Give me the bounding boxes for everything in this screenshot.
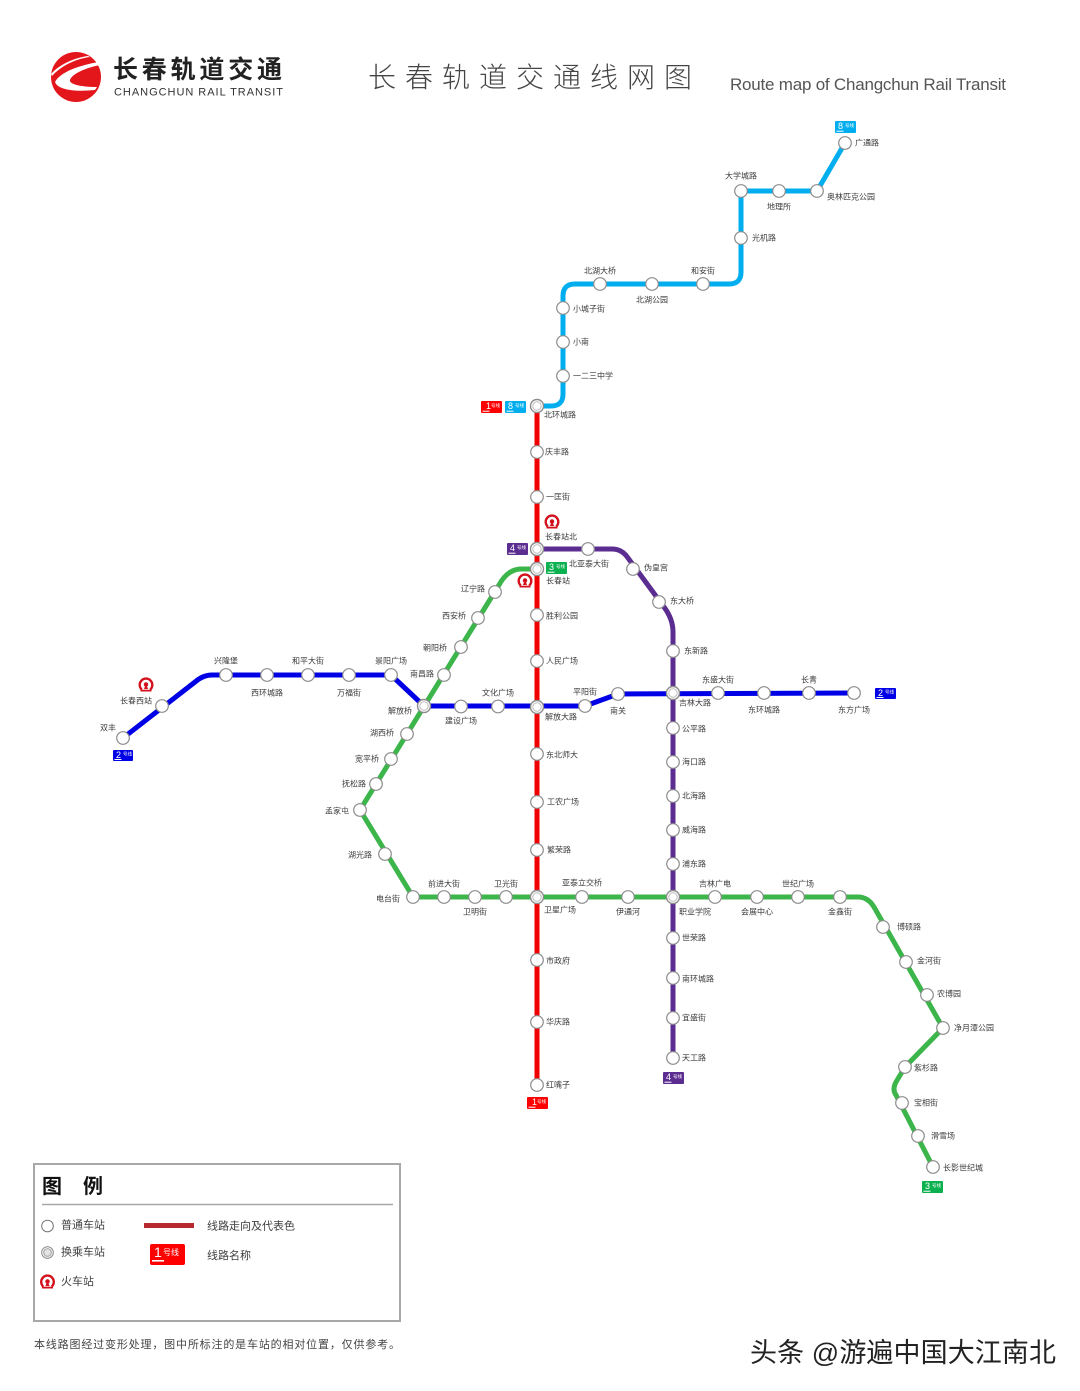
line 3 green: 长影世纪城 xyxy=(943,1162,983,1172)
line 3 green: 朝阳桥 xyxy=(423,642,447,652)
line 3 green: 净月潭公园 xyxy=(954,1022,994,1032)
line 4 purple: 浦东路 xyxy=(682,858,706,868)
line 3 green: 农博园 xyxy=(937,988,961,998)
line 8 cyan xyxy=(537,137,879,406)
line badges: 号线 xyxy=(517,544,526,551)
line 1 red: 卫星广场 xyxy=(544,904,576,914)
line 4 purple: 伪皇宫 xyxy=(644,562,668,572)
line 8 cyan: 一二三中学 xyxy=(573,370,613,380)
line 4 purple: 东新路 xyxy=(684,646,708,656)
line 3 green: 孟家屯 xyxy=(325,806,349,816)
line 2 blue: 西环城路 xyxy=(251,688,283,698)
line 1 red: 工农广场 xyxy=(547,796,579,806)
interchange stations xyxy=(418,400,680,904)
line 2 blue: 长春西站 xyxy=(120,696,152,706)
line 3 green: 伊通河 xyxy=(616,906,640,916)
legend heading: 图例 xyxy=(42,1175,103,1198)
line 3 green: 博硕路 xyxy=(897,922,921,932)
line 1 red: 解放大路 xyxy=(545,712,577,722)
line 2 blue: 景阳广场 xyxy=(375,656,407,666)
line badges: 号线 xyxy=(123,750,132,758)
line 1 red: 繁荣路 xyxy=(547,844,571,854)
line 3 green: 宽平桥 xyxy=(355,754,379,764)
line 1 red: 市政府 xyxy=(546,956,570,966)
line 3 green: 亚泰立交桥 xyxy=(562,878,602,888)
line 3 green: 湖西桥 xyxy=(370,728,394,738)
line 1 red: 北环城路 xyxy=(544,410,576,420)
line badges: 号线 xyxy=(556,563,565,570)
line 4 purple: 北亚泰大街 xyxy=(569,558,609,568)
legend: line colour xyxy=(144,1218,295,1232)
line 3 green: 辽宁路 xyxy=(461,584,485,594)
line badges: 1 xyxy=(532,1097,537,1107)
legend: line badge: 1 xyxy=(154,1244,162,1260)
line 4 purple: 世荣路 xyxy=(682,932,706,942)
line 8 cyan: 广通路 xyxy=(855,138,879,148)
line 1 red: 职业学院 xyxy=(679,906,711,916)
logo xyxy=(51,52,283,102)
line 2 blue: 解放桥 xyxy=(388,706,412,716)
line badges: 8 xyxy=(838,121,843,131)
line 4 purple: 东大桥 xyxy=(670,596,694,606)
line 3 green: 电台街 xyxy=(376,894,400,904)
line 1 red: 庆丰路 xyxy=(545,446,569,456)
line 8 cyan: 北湖大桥 xyxy=(584,266,616,276)
line 3 green: 卫明街 xyxy=(463,906,487,916)
legend: normal station xyxy=(42,1218,105,1232)
line badges: 号线 xyxy=(537,1098,546,1105)
legend: interchange station: 换乘车站 xyxy=(61,1244,105,1258)
logo emblem xyxy=(51,52,101,102)
legend: normal station: 普通车站 xyxy=(61,1218,105,1232)
line 3 green: 吉林广电 xyxy=(699,878,731,888)
footnote: 本线路图经过变形处理，图中所标注的是车站的相对位置，仅供参考。 xyxy=(34,1337,400,1351)
line badges: 4 xyxy=(510,543,515,553)
line 4 purple: 威海路 xyxy=(682,824,706,834)
line badges: 4 xyxy=(666,1072,671,1082)
line 2 blue: 南关 xyxy=(610,706,626,716)
line 4 purple: 南环城路 xyxy=(682,974,714,984)
line badges: 号线 xyxy=(673,1073,682,1080)
line 4 purple: 北海路 xyxy=(682,790,706,800)
legend: line colour: 线路走向及代表色 xyxy=(207,1218,295,1232)
line 8 cyan: 小南 xyxy=(573,336,589,346)
line 2 blue: 建设广场 xyxy=(445,716,477,726)
line 3 green: 宝相街 xyxy=(914,1098,938,1108)
line 1 red: 红嘴子 xyxy=(546,1080,570,1090)
line badges: 1 xyxy=(486,401,491,411)
line 8 cyan: 小城子街 xyxy=(573,304,605,314)
line badges: 2 xyxy=(878,688,883,698)
line 3 green: 西安桥 xyxy=(442,610,466,620)
line 1 red: 人民广场 xyxy=(546,656,578,666)
line 2 blue xyxy=(100,656,870,744)
watermark: 头条 @游遍中国大江南北 xyxy=(750,1338,1056,1368)
line 3 green xyxy=(325,569,994,1173)
line 1 red: 东北师大 xyxy=(546,750,578,760)
line 2 blue: 东方广场 xyxy=(838,704,870,714)
line 3 green: 紫杉路 xyxy=(914,1062,938,1072)
line badges: 号线 xyxy=(845,122,854,129)
legend: interchange station xyxy=(42,1244,105,1258)
line 8 cyan: 北湖公园 xyxy=(636,296,668,304)
line badges: 2 xyxy=(116,750,121,760)
logo Chinese name: 长春轨道交通 xyxy=(113,56,282,84)
line 3 green: 南昌路 xyxy=(410,668,434,678)
line badges: 8 xyxy=(508,401,513,411)
line 1 red: 长春站北 xyxy=(545,532,577,542)
line 3 green: 世纪广场 xyxy=(782,878,814,888)
line 3 green: 滑雪场 xyxy=(931,1130,955,1140)
line 1 red: 一匡街 xyxy=(546,492,570,502)
line 2 blue: 东环城路 xyxy=(748,704,780,714)
line 4 purple: 天工路 xyxy=(682,1052,706,1062)
line 2 blue: 平阳街 xyxy=(573,686,597,696)
legend: line badge: 线路名称 xyxy=(207,1248,251,1262)
line 3 green: 会展中心 xyxy=(741,906,773,916)
panel: legend xyxy=(34,1164,400,1321)
line 2 blue: 万福街 xyxy=(337,688,361,698)
logo English name: CHANGCHUN RAIL TRANSIT xyxy=(114,86,283,98)
line 1 red: 华庆路 xyxy=(546,1016,570,1026)
line 8 cyan: 和安街 xyxy=(691,266,715,276)
line badges: 号线 xyxy=(885,688,894,696)
line 1 red xyxy=(531,406,711,1091)
legend: line badge: 号线 xyxy=(163,1247,179,1257)
line badges: 号线 xyxy=(932,1182,941,1189)
line 3 green: 卫光街 xyxy=(494,878,518,888)
line 8 cyan: 地理所 xyxy=(767,202,791,212)
line 1 red: 长春站 xyxy=(546,576,570,586)
line 2 blue: 文化广场 xyxy=(482,688,514,698)
line 4 purple xyxy=(537,543,714,1064)
line 2 blue: 吉林大路 xyxy=(679,698,711,708)
line 3 green: 抚松路 xyxy=(342,778,366,788)
legend: railway station xyxy=(41,1274,94,1288)
English title: Route map of Changchun Rail Transit xyxy=(730,75,1006,94)
line 2 blue: 长青 xyxy=(801,674,817,684)
line 2 blue: 双丰 xyxy=(100,722,116,732)
line 3 green: 金河街 xyxy=(917,956,941,966)
line 4 purple: 公平路 xyxy=(682,724,706,734)
line 4 purple: 宜盛街 xyxy=(682,1012,706,1022)
line badges: 3 xyxy=(925,1181,930,1191)
line 8 cyan: 光机路 xyxy=(752,232,776,242)
line 1 red: 胜利公园 xyxy=(546,610,578,620)
line badges: 3 xyxy=(549,562,554,572)
line 3 green: 前进大街 xyxy=(428,878,460,888)
line 2 blue: 东盛大街 xyxy=(702,674,734,684)
line 8 cyan: 大学城路 xyxy=(725,170,757,180)
line 2 blue: 和平大街 xyxy=(292,656,324,666)
line badges: 号线 xyxy=(491,402,500,409)
line 4 purple: 海口路 xyxy=(682,756,706,766)
line 2 blue: 兴隆堡 xyxy=(214,656,238,666)
title: 长春轨道交通线网图 xyxy=(368,62,692,93)
line 3 green: 金鑫街 xyxy=(828,906,852,916)
legend: railway station: 火车站 xyxy=(61,1274,94,1288)
line badges xyxy=(113,121,943,1193)
line 3 green: 湖光路 xyxy=(348,850,372,860)
legend: line badge xyxy=(150,1244,251,1265)
railway station icons xyxy=(140,516,558,692)
line badges: 号线 xyxy=(515,402,524,409)
line 8 cyan: 奥林匹克公园 xyxy=(827,192,875,202)
